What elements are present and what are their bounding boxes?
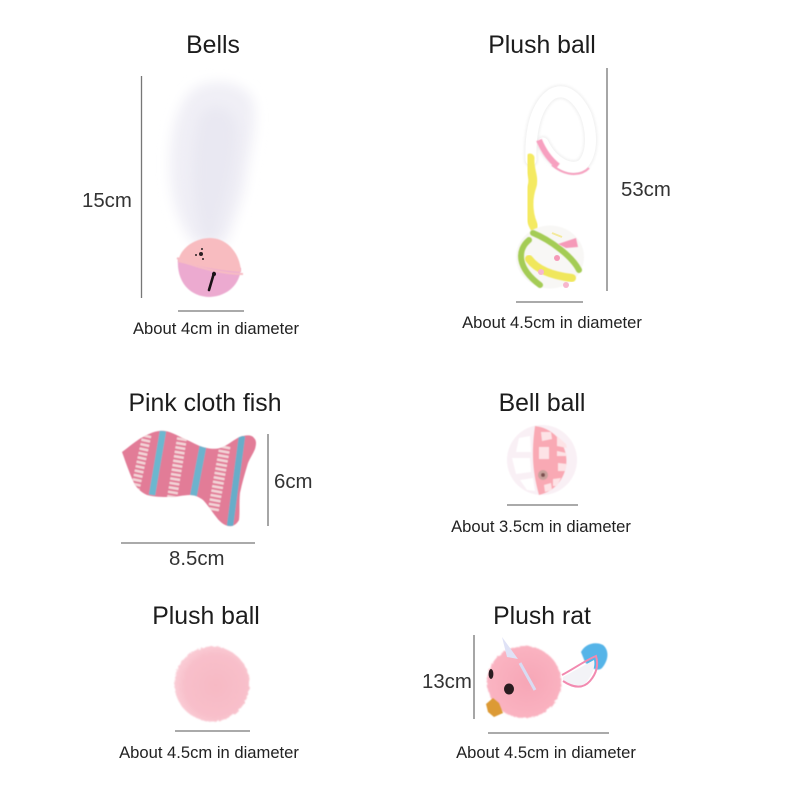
caption: bell ball: About 3.5cm in diameter [451, 517, 631, 536]
dimension: fish width [121, 543, 255, 570]
panel: plush rat [422, 603, 636, 762]
dimension: bell ball diameter [507, 504, 578, 506]
heading: pink cloth fish: Pink cloth fish [129, 390, 281, 417]
heading: plush ball small: Plush ball [152, 603, 260, 630]
dimension: ball diameter [516, 301, 583, 303]
dimension: fish height [268, 434, 313, 526]
caption: plush ball small: About 4.5cm in diameter [119, 743, 299, 762]
icon: cloth fish [118, 428, 260, 530]
icon: plush rat [486, 637, 607, 718]
caption: plush rat: About 4.5cm in diameter [456, 743, 636, 762]
dimension: rat diameter [488, 732, 609, 734]
dimension: rat height [422, 635, 474, 719]
icon: lattice bell ball [507, 425, 577, 495]
dimension: pompom diameter [175, 730, 250, 732]
icon: bell with feather [170, 82, 255, 297]
panel: plush ball small [119, 603, 299, 762]
dimension: bells height: 15cm [82, 190, 132, 212]
dimension: fish height: 6cm [274, 471, 313, 493]
dimension: fish width: 8.5cm [169, 548, 225, 570]
icon: rope and yarn ball [516, 92, 591, 288]
dimension: bell diameter [178, 310, 244, 312]
icon: pink pompom [174, 646, 250, 722]
heading: plush rat: Plush rat [493, 603, 591, 630]
caption: plush ball: About 4.5cm in diameter [462, 313, 642, 332]
dimension: rope height: 53cm [621, 179, 671, 201]
dimension: rat height: 13cm [422, 671, 472, 693]
caption: bells: About 4cm in diameter [133, 319, 299, 338]
panel: pink cloth fish [118, 390, 313, 570]
heading: bell ball: Bell ball [499, 390, 585, 417]
panel: bells [82, 32, 299, 338]
panel: plush ball with rope [462, 32, 671, 332]
heading: bells: Bells [186, 32, 240, 59]
heading: plush ball: Plush ball [488, 32, 596, 59]
panel: bell ball [451, 390, 631, 536]
